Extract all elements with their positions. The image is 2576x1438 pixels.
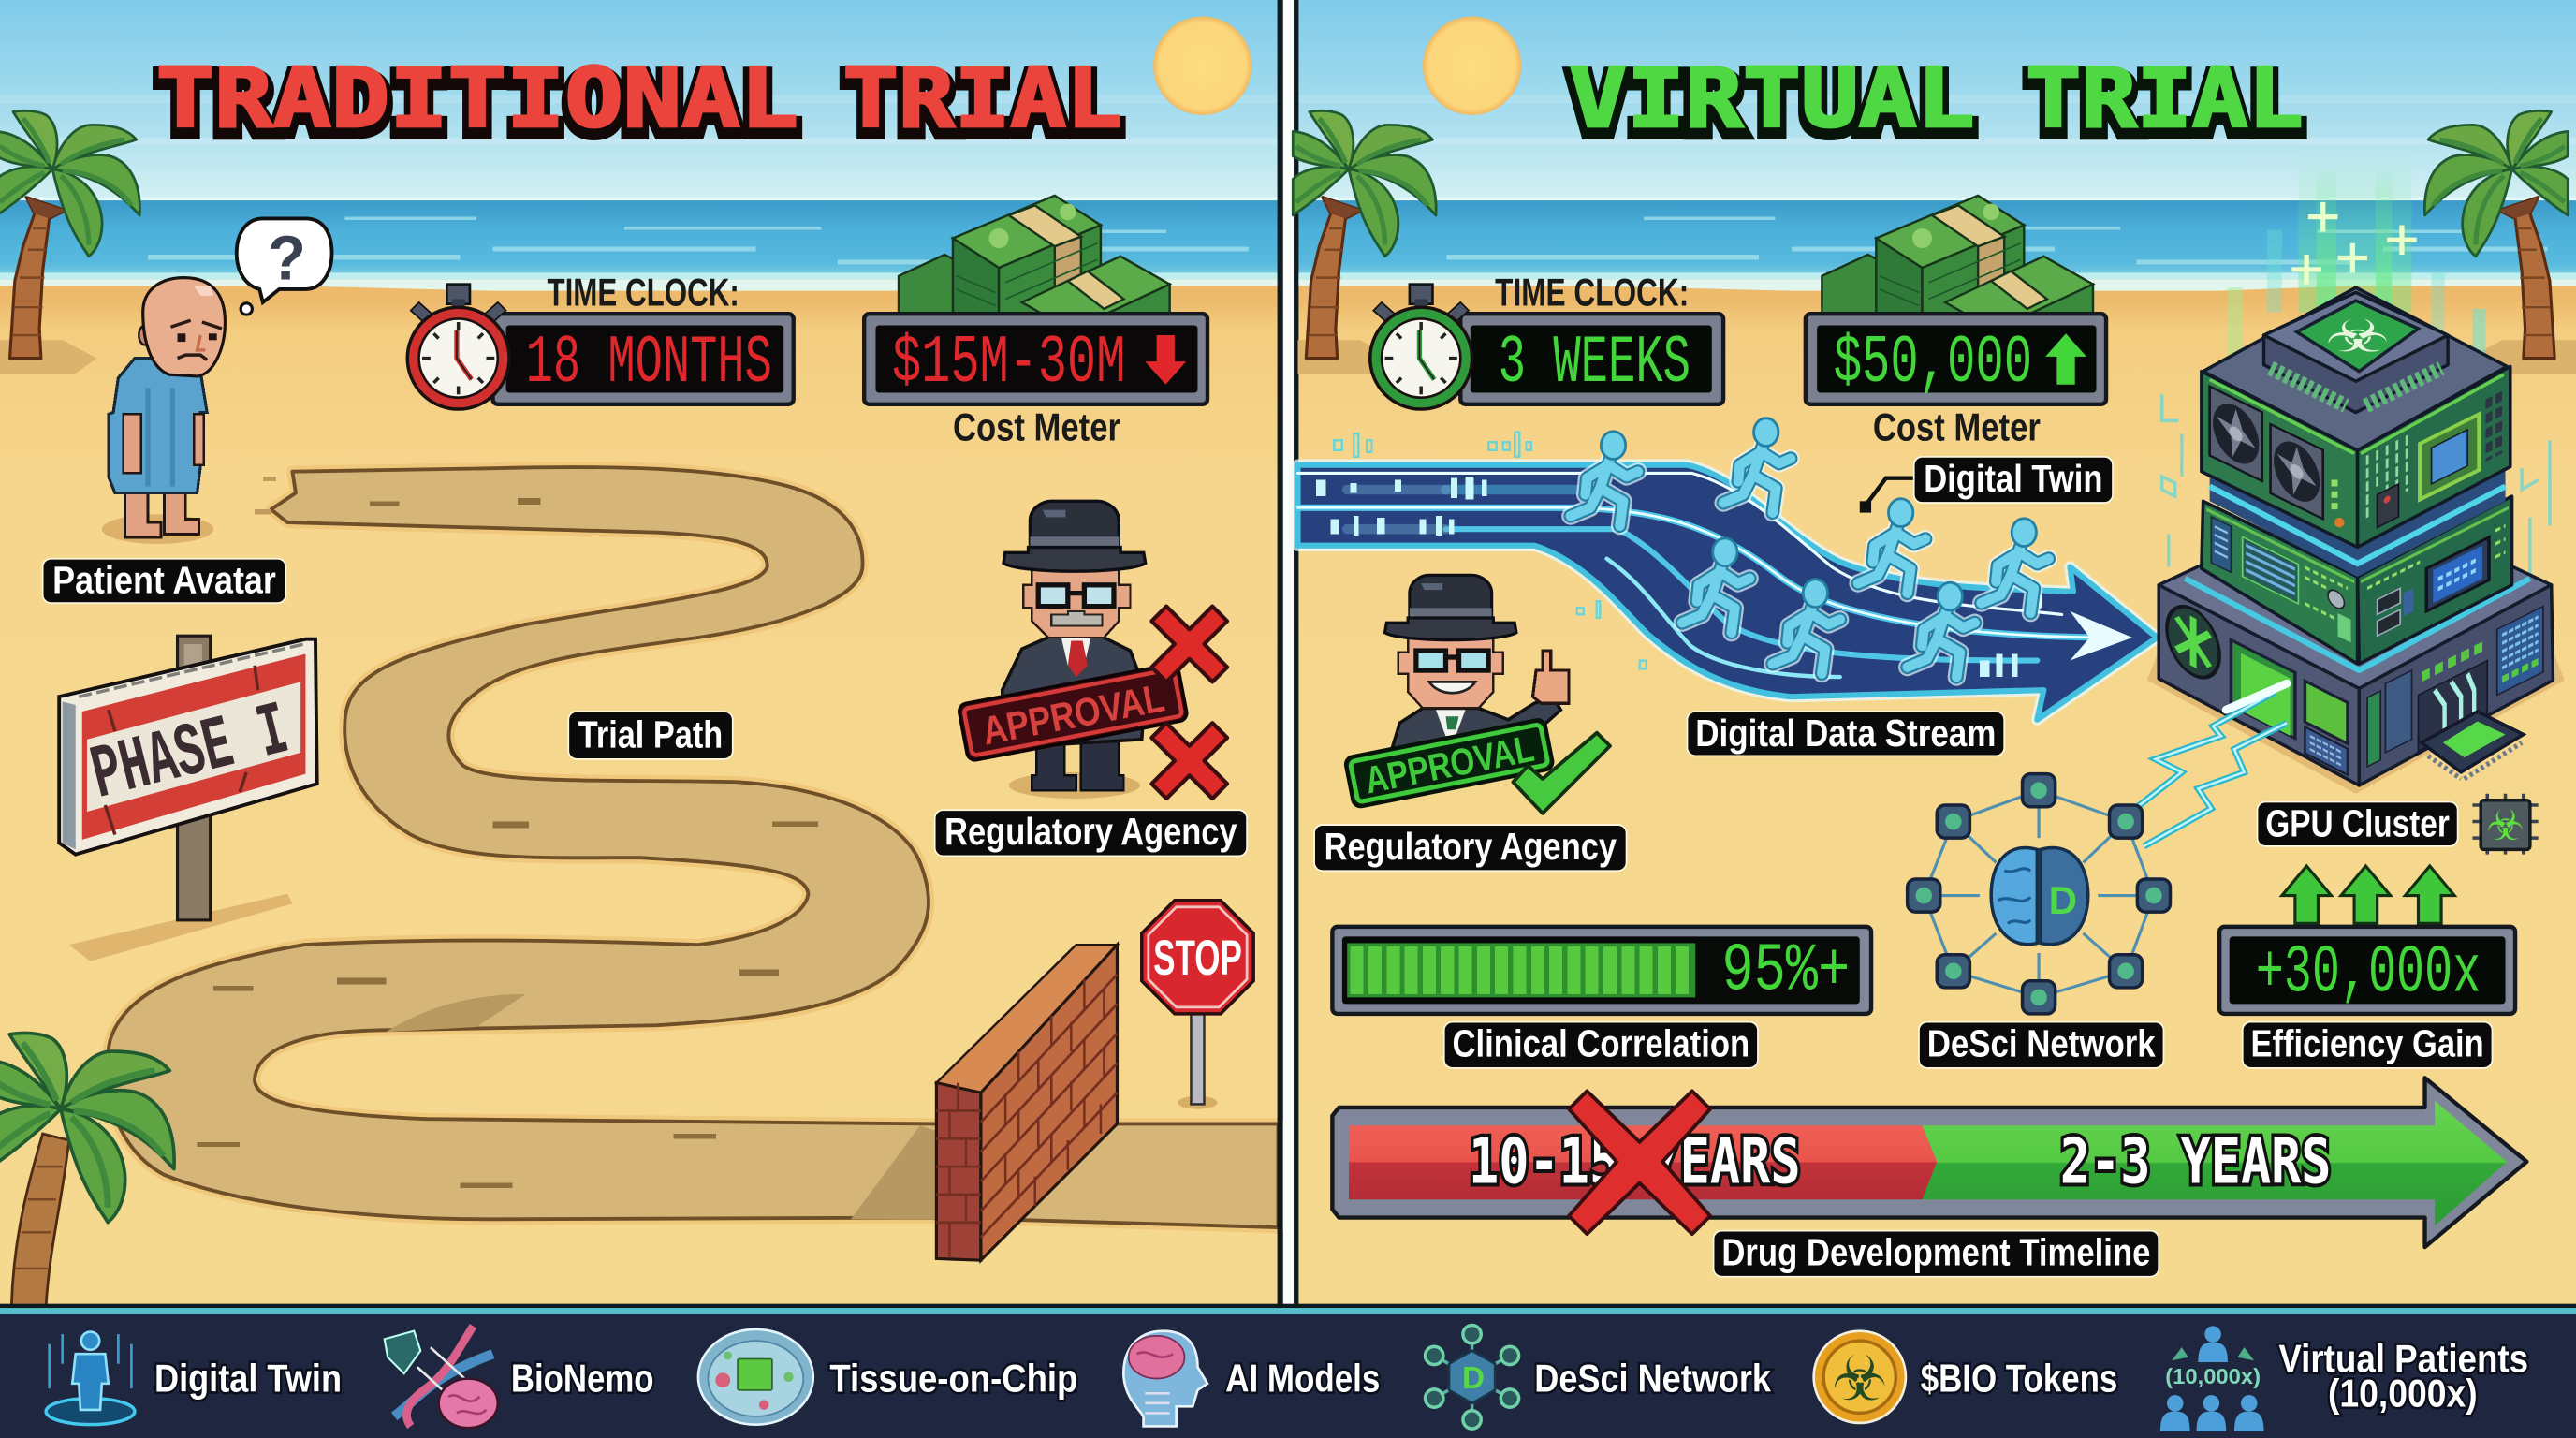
icon: big x mark [1569, 1091, 1710, 1234]
palm tree right [2424, 110, 2576, 374]
sun [1423, 17, 1521, 115]
legend text: virtual patients [2278, 1337, 2528, 1415]
drug development timeline arrow: 10-15 YEARS [1469, 1125, 1801, 1198]
icon: bionemo [385, 1326, 498, 1428]
title: virtual trial: VIRTUAL [1569, 57, 1975, 153]
label: regulatory agency: Regulatory Agency [1325, 825, 1617, 868]
icon: stopwatch green [1370, 285, 1472, 409]
icon: stopwatch red [407, 285, 509, 409]
drug development timeline arrow: 2-3 YEARS [2060, 1125, 2331, 1198]
panel dividers [1278, 0, 1298, 1308]
label: patient avatar: Patient Avatar [52, 559, 276, 602]
legend text: virtual patients: Virtual Patients [2278, 1337, 2528, 1381]
phase i sign: PHASE I [83, 689, 297, 819]
icon: network nodes [1908, 774, 2170, 1014]
label: gpu cluster: GPU Cluster [2265, 801, 2450, 844]
efficiency gain: +30,000x [2256, 934, 2481, 1011]
lightning link [2130, 683, 2287, 846]
label: digital twin callout [1860, 457, 2113, 513]
icon: arrow up [2045, 333, 2086, 385]
palm tree top left [0, 110, 139, 374]
palm tree bottom left [0, 1033, 174, 1306]
time clock: 3 weeks [1370, 270, 1723, 409]
label: digital data stream: Digital Data Stream [1695, 712, 1996, 755]
drug development timeline arrow [1332, 1078, 2526, 1247]
icon: desci network: D [1462, 1361, 1485, 1396]
time clock: 18 months: 18 MONTHS [526, 325, 772, 402]
label: digital twin callout: Digital Twin [1924, 457, 2103, 500]
icon: thought bubble [237, 218, 332, 315]
cost meter: virtual: Cost Meter [1873, 404, 2041, 448]
title: traditional trial: TRIAL [842, 51, 1122, 146]
icon: ai models head [1123, 1331, 1208, 1426]
brick wall [851, 945, 1117, 1260]
title: virtual trial [1569, 51, 2304, 153]
gown [109, 359, 207, 493]
cost meter: virtual: $50,000 [1834, 325, 2032, 402]
label: drug development timeline: Drug Development Timeline [1721, 1230, 2150, 1273]
legend text: bio tokens: $BIO Tokens [1921, 1357, 2117, 1401]
label: trial path: Trial Path [578, 713, 723, 756]
title: traditional trial: TRADITIONAL [156, 57, 798, 153]
title: virtual trial: VIRTUAL [1569, 51, 1975, 146]
icon: check mark [1513, 733, 1610, 814]
patient avatar [102, 218, 332, 544]
trial path [107, 467, 1278, 1227]
base right face details [2367, 605, 2543, 776]
digital data stream [1298, 418, 2157, 720]
efficiency gain [2219, 866, 2515, 1014]
icon: tissue-on-chip [698, 1329, 813, 1425]
icon: bio token coin: ☣ [1832, 1342, 1888, 1415]
base unit [2159, 493, 2553, 785]
legs and feet [124, 493, 198, 537]
icon: thumbs up [1533, 651, 1569, 703]
base-mounted chip [2422, 712, 2524, 779]
label: efficiency gain: Efficiency Gain [2250, 1022, 2484, 1065]
panel: virtual trial [1293, 0, 2576, 1306]
icon: up arrows [2282, 866, 2454, 923]
pins and biohazard chip: ☣ [2325, 311, 2390, 362]
regulatory agency: blocked [958, 501, 1227, 799]
approval stamp red: APPROVAL [979, 675, 1168, 753]
icon: thought bubble: ? [268, 224, 306, 293]
legend text: ai models: AI Models [1225, 1357, 1380, 1401]
icon: money stacks [899, 196, 1170, 330]
cost meter: traditional [864, 196, 1208, 448]
icon: virtual patients [2160, 1326, 2264, 1431]
regulatory agency: approved [1344, 575, 1610, 814]
clinical correlation bar: 95%+ [1721, 933, 1850, 1010]
icon: virtual patients: (10,000x) [2165, 1364, 2261, 1388]
icon: bio token coin [1814, 1331, 1906, 1423]
cost meter: virtual [1806, 196, 2106, 448]
stop sign: STOP [1153, 931, 1242, 986]
layer 1 board [2202, 287, 2510, 547]
icon: arrow down [1145, 335, 1186, 385]
time clock: 18 months: TIME CLOCK: [547, 270, 739, 314]
legend text: virtual patients: (10,000x) [2328, 1371, 2478, 1415]
pins and biohazard chip [2271, 301, 2441, 406]
phase i sign [59, 636, 317, 961]
icon: x mark top [1151, 607, 1227, 682]
legend text: tissue-on-chip: Tissue-on-Chip [829, 1357, 1077, 1401]
panel bottom border [0, 1304, 2576, 1309]
icon: digital twin runners [1571, 418, 2049, 677]
icon: biohazard chip: ☣ [2486, 800, 2525, 850]
title: virtual trial: TRIAL [2026, 57, 2304, 153]
label: clinical correlation: Clinical Correlation [1453, 1022, 1749, 1065]
legend text: digital twin: Digital Twin [154, 1357, 342, 1401]
icon: biohazard chip [2472, 794, 2539, 855]
icon: monitors [2367, 389, 2499, 533]
icon: fans [2210, 387, 2345, 527]
icon: money stacks [1822, 196, 2093, 330]
sun [1153, 17, 1251, 115]
stop sign [1142, 901, 1253, 1109]
approval stamp green: APPROVAL [1361, 726, 1537, 801]
time clock: 3 weeks: 3 WEEKS [1499, 325, 1690, 402]
icon: brain [1991, 848, 2088, 945]
legend bar [0, 1308, 2576, 1438]
cost meter: traditional: Cost Meter [953, 404, 1120, 448]
desci network [1908, 774, 2170, 1014]
palm tree left [1293, 110, 1436, 374]
base left face details [2167, 595, 2348, 775]
title: traditional trial: TRADITIONAL [156, 51, 798, 146]
label: desci network: DeSci Network [1927, 1022, 2156, 1065]
head [139, 326, 152, 345]
title: traditional trial [156, 51, 1122, 153]
label: regulatory agency: Regulatory Agency [944, 810, 1237, 853]
icon: digital twin [46, 1332, 135, 1425]
legend text: desci network: DeSci Network [1534, 1357, 1771, 1401]
cost meter: traditional: $15M-30M [892, 325, 1125, 402]
time clock: 3 weeks: TIME CLOCK: [1495, 270, 1689, 314]
title: virtual trial: TRIAL [2026, 51, 2304, 146]
green glow beams [2228, 148, 2485, 363]
layer 2 board [2202, 496, 2512, 664]
cooling band [2210, 468, 2506, 577]
time clock: 18 months [407, 270, 794, 409]
icon: brain: D [2049, 878, 2077, 922]
panel: traditional trial [0, 0, 1278, 1306]
icon: x mark bottom [1151, 723, 1227, 799]
clinical correlation bar [1332, 927, 1871, 1014]
legend text: bionemo: BioNemo [511, 1357, 654, 1401]
gpu cluster [2147, 148, 2565, 794]
title: traditional trial: TRIAL [842, 57, 1122, 153]
icon: desci network [1426, 1325, 1519, 1429]
